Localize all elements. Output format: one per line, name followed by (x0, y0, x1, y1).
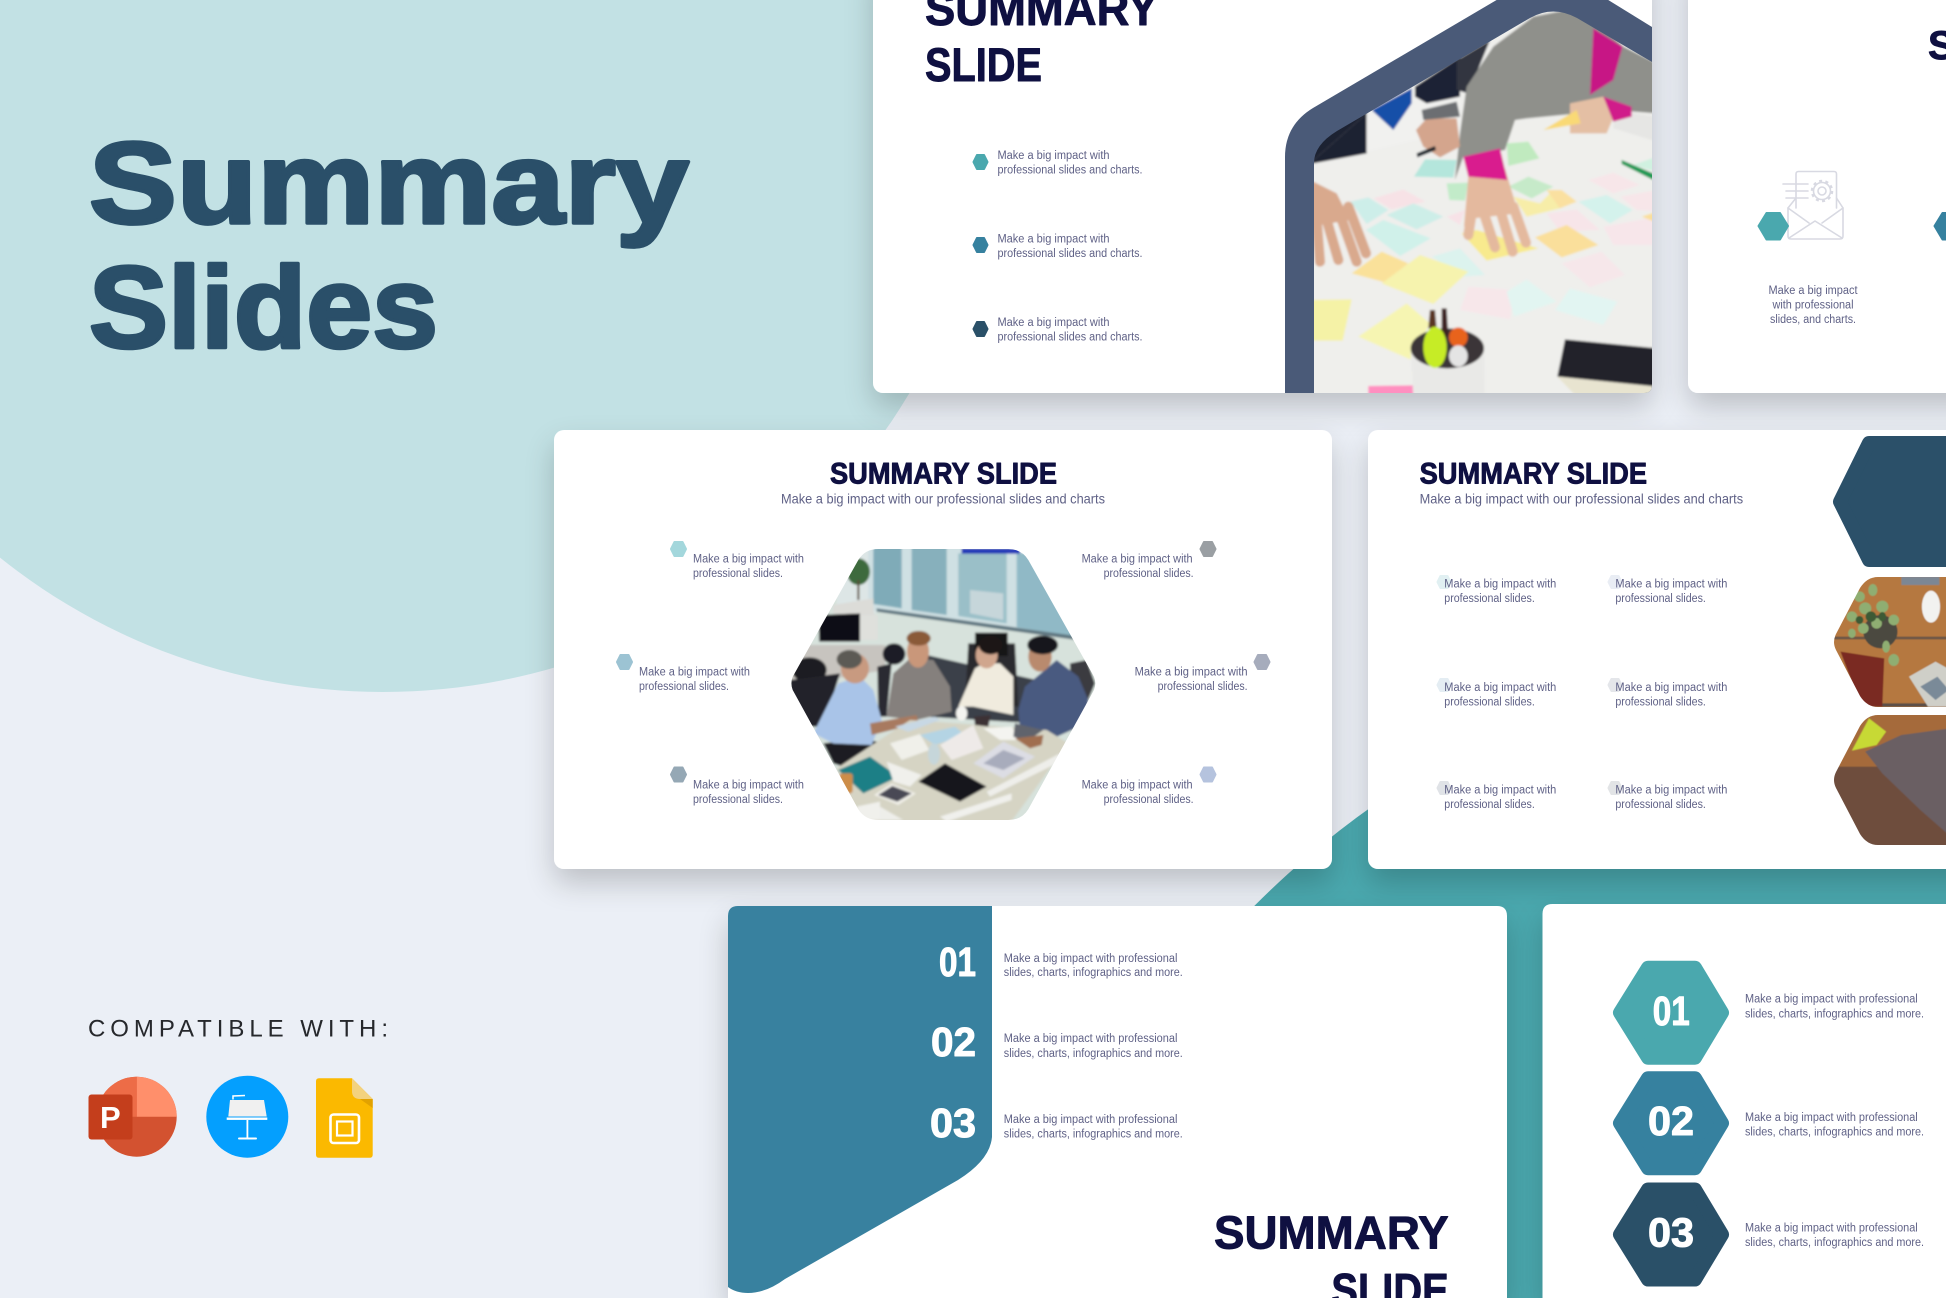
main title: Summary (89, 118, 689, 248)
panel: bottom right slide with numbered hexagons (1542, 904, 1946, 1298)
heading: SUMMARY SLIDE (830, 457, 1057, 490)
bullet 2: professional slides and charts. (998, 248, 1142, 260)
text 02: slides, charts, infographics and more. (1745, 1127, 1924, 1139)
item row 2 column 1: professional slides. (1444, 696, 1535, 708)
text 03 (1004, 1114, 1183, 1140)
item top left: professional slides. (693, 568, 783, 580)
item middle left: Make a big impact with (639, 667, 750, 679)
item middle right: professional slides. (1158, 681, 1248, 693)
text 02 (1745, 1112, 1924, 1139)
photo: sticky notes on table (1310, 0, 1657, 397)
item row 3 column 1: professional slides. (1444, 799, 1535, 811)
item top left: Make a big impact with (693, 554, 804, 566)
hexagon 03: 03 (1648, 1210, 1694, 1256)
text block: with professional (1772, 300, 1854, 312)
item row 2 column 2: Make a big impact with (1615, 682, 1727, 694)
solid dark hexagon (1840, 443, 1946, 560)
text 01 (1745, 994, 1924, 1020)
text 03 (1745, 1222, 1924, 1249)
number 02: 02 (931, 1019, 976, 1065)
icon: PowerPoint (88, 1077, 177, 1157)
item row 3 column 1: Make a big impact with (1444, 785, 1556, 797)
item top right: Make a big impact with (1082, 554, 1193, 566)
panel: bottom slide with blue shape (728, 906, 1507, 1298)
text block: slides, and charts. (1770, 314, 1856, 326)
item bottom left: professional slides. (693, 794, 783, 806)
item middle left: professional slides. (639, 681, 729, 693)
photo: person at wooden desk (1829, 713, 1946, 847)
item row 2 column 1: Make a big impact with (1444, 682, 1556, 694)
item top right: professional slides. (1104, 568, 1194, 580)
heading (925, 0, 1158, 91)
subheading: Make a big impact with our professional slides and charts (781, 490, 1105, 506)
item middle right: Make a big impact with (1135, 667, 1248, 679)
item row 1 column 2 (1608, 576, 1727, 605)
bullet 1: Make a big impact with (998, 150, 1110, 162)
text 01: Make a big impact with professional (1745, 994, 1918, 1006)
text 03: slides, charts, infographics and more. (1004, 1128, 1183, 1140)
heading: SLIDE (925, 38, 1042, 91)
bullet 2 (974, 234, 1142, 260)
panel: right slide with hexagon stack (1368, 430, 1946, 869)
item top left (671, 542, 804, 580)
decorative dark teal circle (988, 638, 1946, 1298)
hexagon marker (1758, 213, 1788, 240)
blue angled shape (728, 906, 992, 1293)
item bottom right (1082, 768, 1216, 806)
item row 3 column 2 (1608, 782, 1727, 811)
item bottom right: Make a big impact with (1082, 780, 1193, 792)
text 03: slides, charts, infographics and more. (1745, 1237, 1924, 1249)
text 01: slides, charts, infographics and more. (1004, 967, 1183, 979)
text 02 (1004, 1033, 1183, 1060)
text 03: Make a big impact with professional (1745, 1222, 1918, 1234)
item row 1 column 2: professional slides. (1615, 593, 1706, 605)
heading: SUMMARY (1214, 1207, 1449, 1259)
item bottom right: professional slides. (1104, 794, 1194, 806)
number 03: 03 (930, 1100, 976, 1146)
text 03: Make a big impact with professional (1004, 1114, 1177, 1126)
item middle right (1135, 655, 1270, 693)
text block (1768, 285, 1858, 326)
item row 1 column 1 (1438, 576, 1556, 605)
text 02: Make a big impact with professional (1745, 1112, 1918, 1124)
main title: Slides (89, 242, 438, 372)
panel: top slide with bullet list (873, 0, 1657, 397)
icon: Keynote (206, 1076, 288, 1158)
text 01: slides, charts, infographics and more. (1745, 1008, 1924, 1020)
decorative light teal circle (0, 0, 996, 692)
bullet 1: professional slides and charts. (998, 164, 1142, 176)
icon: PowerPoint: P (100, 1100, 121, 1135)
panel: top right slide with icon (1688, 0, 1946, 393)
item top right (1082, 542, 1216, 580)
hexagon 03 (1620, 1190, 1722, 1280)
hexagon 02: 02 (1648, 1098, 1694, 1144)
number 01: 01 (939, 939, 976, 985)
text 01 (1004, 953, 1183, 979)
item row 3 column 2: professional slides. (1615, 799, 1706, 811)
heading (1214, 1207, 1449, 1298)
bullet 1 (974, 150, 1142, 176)
bullet 3: Make a big impact with (998, 317, 1110, 329)
item bottom left: Make a big impact with (693, 780, 804, 792)
photo: team meeting in hexagon (787, 547, 1100, 823)
text block: Make a big impact (1768, 285, 1858, 297)
item row 2 column 2 (1608, 679, 1727, 708)
item row 3 column 1 (1438, 782, 1556, 811)
item row 2 column 2: professional slides. (1615, 696, 1706, 708)
text 02: Make a big impact with professional (1004, 1033, 1177, 1045)
bullet 3: professional slides and charts. (998, 331, 1142, 343)
item middle left (617, 655, 750, 693)
photo: wooden desk with plant (1829, 575, 1946, 708)
bullet 3 (974, 317, 1142, 343)
icon: envelope with gear (1783, 172, 1843, 239)
item row 3 column 2: Make a big impact with (1615, 785, 1727, 797)
hexagon frame (1285, 0, 1652, 393)
hexagon 02 (1620, 1078, 1722, 1168)
item row 1 column 2: Make a big impact with (1615, 579, 1727, 591)
icon: Google Slides (316, 1078, 373, 1158)
hexagon 01 (1620, 968, 1722, 1058)
main title (89, 118, 689, 372)
heading: SUMMARY SLIDE (1420, 457, 1647, 490)
panel: center slide with hex photo (554, 430, 1332, 869)
item row 1 column 1: professional slides. (1444, 593, 1535, 605)
hexagon 01: 01 (1653, 988, 1690, 1034)
bullet 2: Make a big impact with (998, 233, 1110, 245)
item row 2 column 1 (1438, 679, 1556, 708)
hexagon marker partial (1934, 213, 1946, 240)
compatible with label: COMPATIBLE WITH: (88, 1016, 388, 1042)
item bottom left (671, 768, 804, 806)
text 01: Make a big impact with professional (1004, 953, 1177, 965)
text 02: slides, charts, infographics and more. (1004, 1048, 1183, 1060)
subheading: Make a big impact with our professional slides and charts (1420, 490, 1743, 506)
item row 1 column 1: Make a big impact with (1444, 579, 1556, 591)
